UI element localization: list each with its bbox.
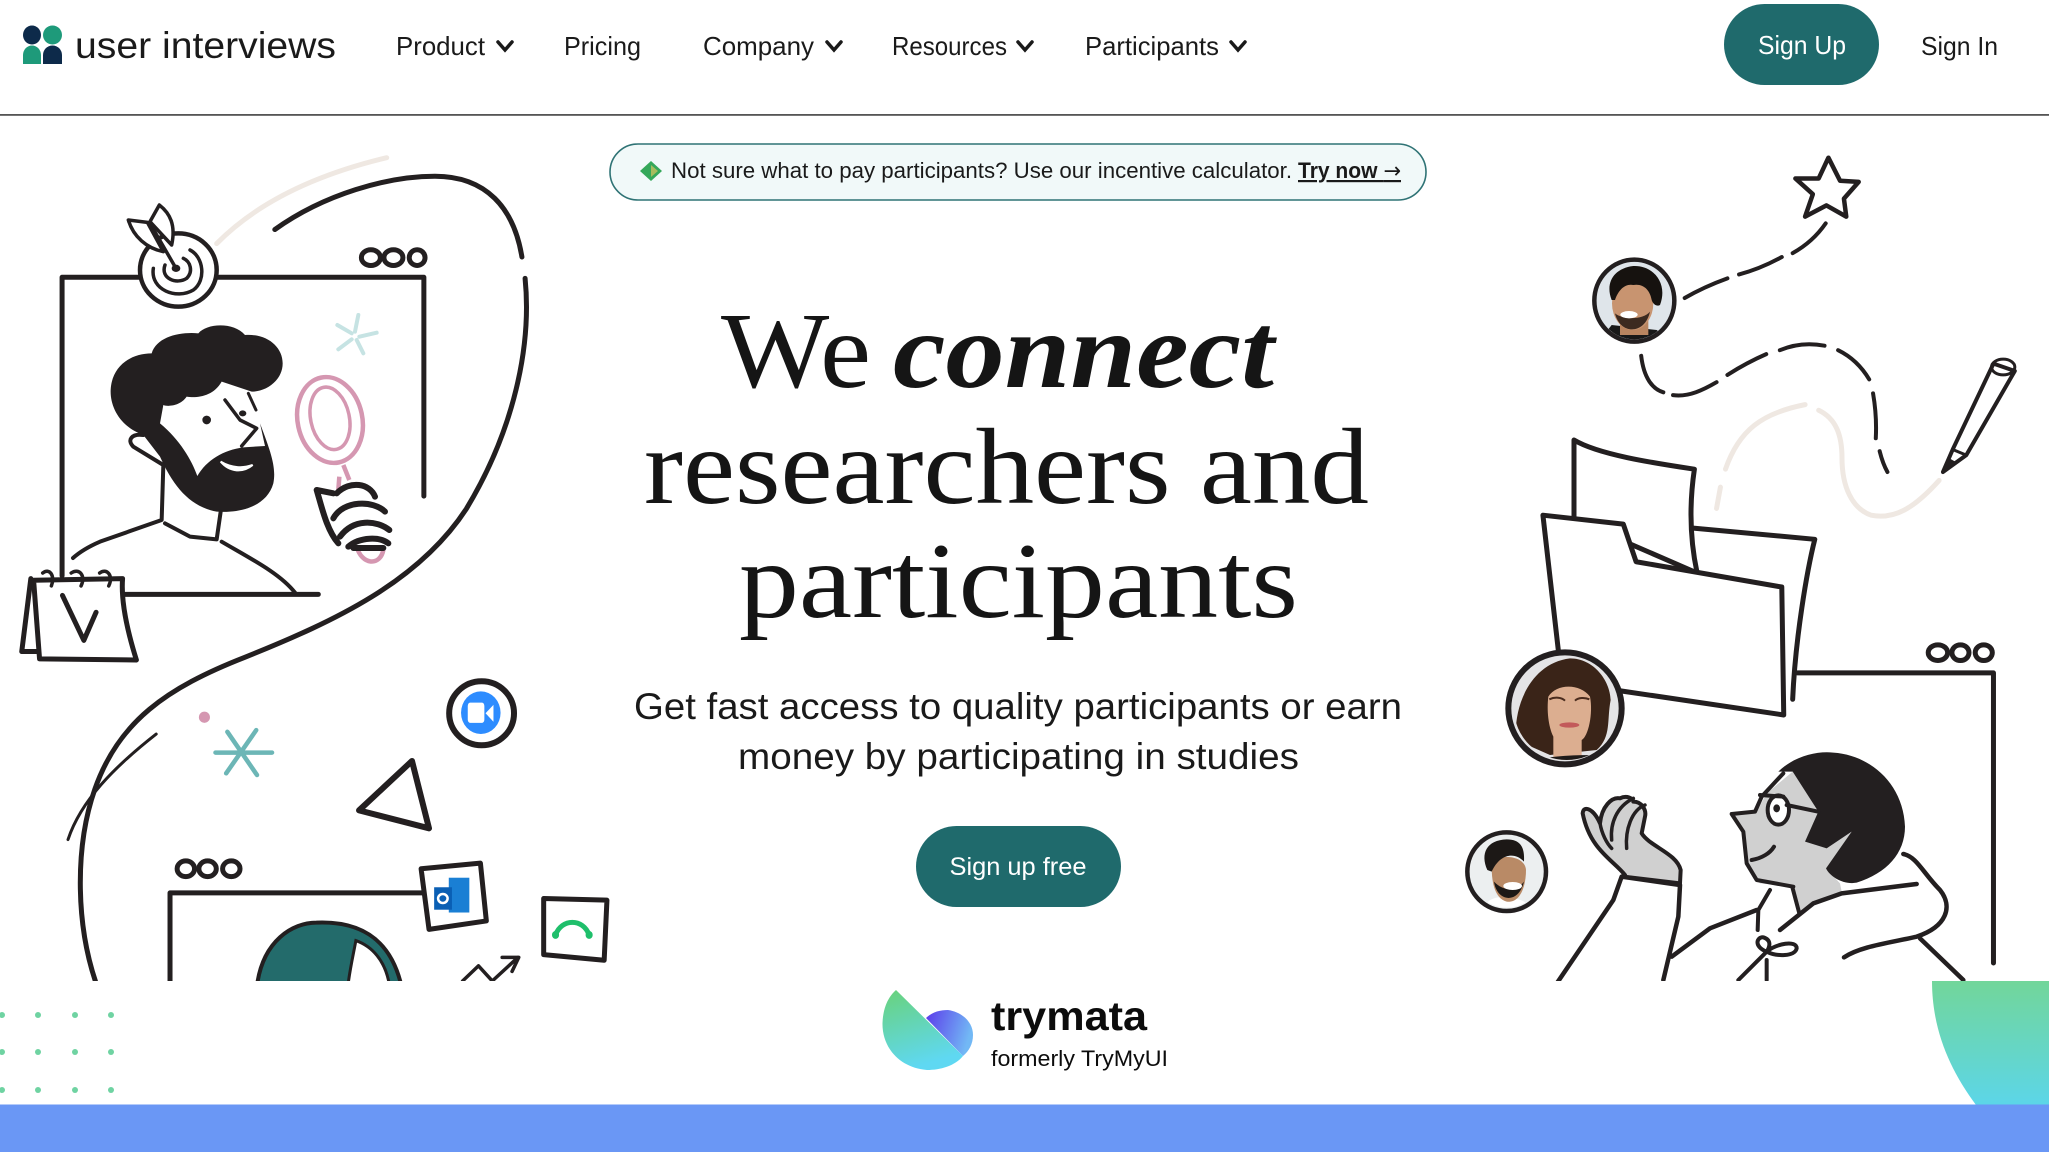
avatar: woman with wavy hair	[1508, 652, 1622, 764]
decorative dots	[0, 1012, 114, 1093]
subheading: money by participating in studies	[738, 736, 1299, 777]
avatar: bearded man	[1467, 832, 1546, 917]
avatar: smiling man	[1594, 260, 1674, 342]
teal asterisk	[215, 730, 272, 775]
target, man and magnifier	[73, 205, 389, 593]
man with beard	[73, 325, 295, 593]
swoosh lines	[68, 158, 526, 985]
nav item: Resources: Resources	[892, 31, 1007, 61]
banner link: Try now →	[1298, 158, 1401, 184]
nav item: Company: Company	[703, 31, 814, 61]
triangle	[359, 761, 429, 828]
profile and glasses	[1732, 773, 1818, 930]
chart arrow	[463, 957, 519, 981]
icon: target with arrow	[128, 205, 217, 307]
face	[1732, 772, 1852, 913]
headline: We	[721, 292, 871, 411]
icon: calendar with check	[22, 571, 136, 660]
sign in link: Sign In	[1921, 31, 1998, 61]
headline	[644, 292, 1369, 641]
sign up button	[1724, 4, 1879, 85]
window frame	[1797, 645, 1993, 963]
headline: participants	[739, 522, 1298, 641]
magnifying glass	[289, 371, 389, 562]
sign up free button: Sign up free	[950, 853, 1086, 881]
winding dashed path	[1641, 344, 1887, 472]
logo mark	[882, 990, 973, 1070]
subheading	[634, 686, 1402, 777]
right illustration	[1543, 158, 2015, 963]
blue footer band	[0, 1104, 2049, 1152]
nav item: Participants: Participants	[1085, 31, 1219, 61]
folder with sheet	[1543, 440, 1815, 715]
icon: survey tile	[544, 898, 607, 960]
icon: pencil	[1941, 359, 2015, 474]
brand name: trymata	[991, 993, 1148, 1039]
icon: video call badge	[449, 681, 514, 745]
corner shape	[1932, 981, 2049, 1105]
dashed path to star	[1685, 223, 1826, 298]
faded path	[1717, 405, 1939, 516]
incentive banner	[610, 144, 1426, 200]
logo: user interviews	[75, 25, 336, 66]
teal hair figure	[257, 922, 401, 985]
woman with glasses	[1550, 752, 1963, 993]
nav item: Product: Product	[396, 31, 486, 61]
trymata logo	[882, 990, 1168, 1071]
lower window frame	[170, 861, 423, 985]
pink dot	[199, 712, 210, 723]
icon: star	[1795, 158, 1859, 217]
brand note: formerly TryMyUI	[991, 1046, 1168, 1071]
headline: researchers and	[644, 408, 1369, 527]
banner text: Not sure what to pay participants? Use our incentive calculator.	[671, 158, 1292, 183]
hair	[1778, 752, 1905, 883]
window frame	[62, 250, 425, 594]
icon: outlook tile	[421, 863, 486, 929]
nav item: Pricing: Pricing	[564, 31, 641, 61]
subheading: Get fast access to quality participants or earn	[634, 686, 1402, 727]
sign up button: Sign Up	[1758, 30, 1846, 60]
pale asterisk	[337, 315, 377, 353]
headline: connect	[893, 292, 1277, 411]
icon: money	[640, 161, 662, 181]
left illustration	[22, 158, 607, 985]
raised hand	[1583, 797, 1681, 883]
sign up free button	[916, 826, 1121, 907]
navigation bar	[23, 4, 1998, 85]
hoodie	[1550, 854, 1963, 993]
